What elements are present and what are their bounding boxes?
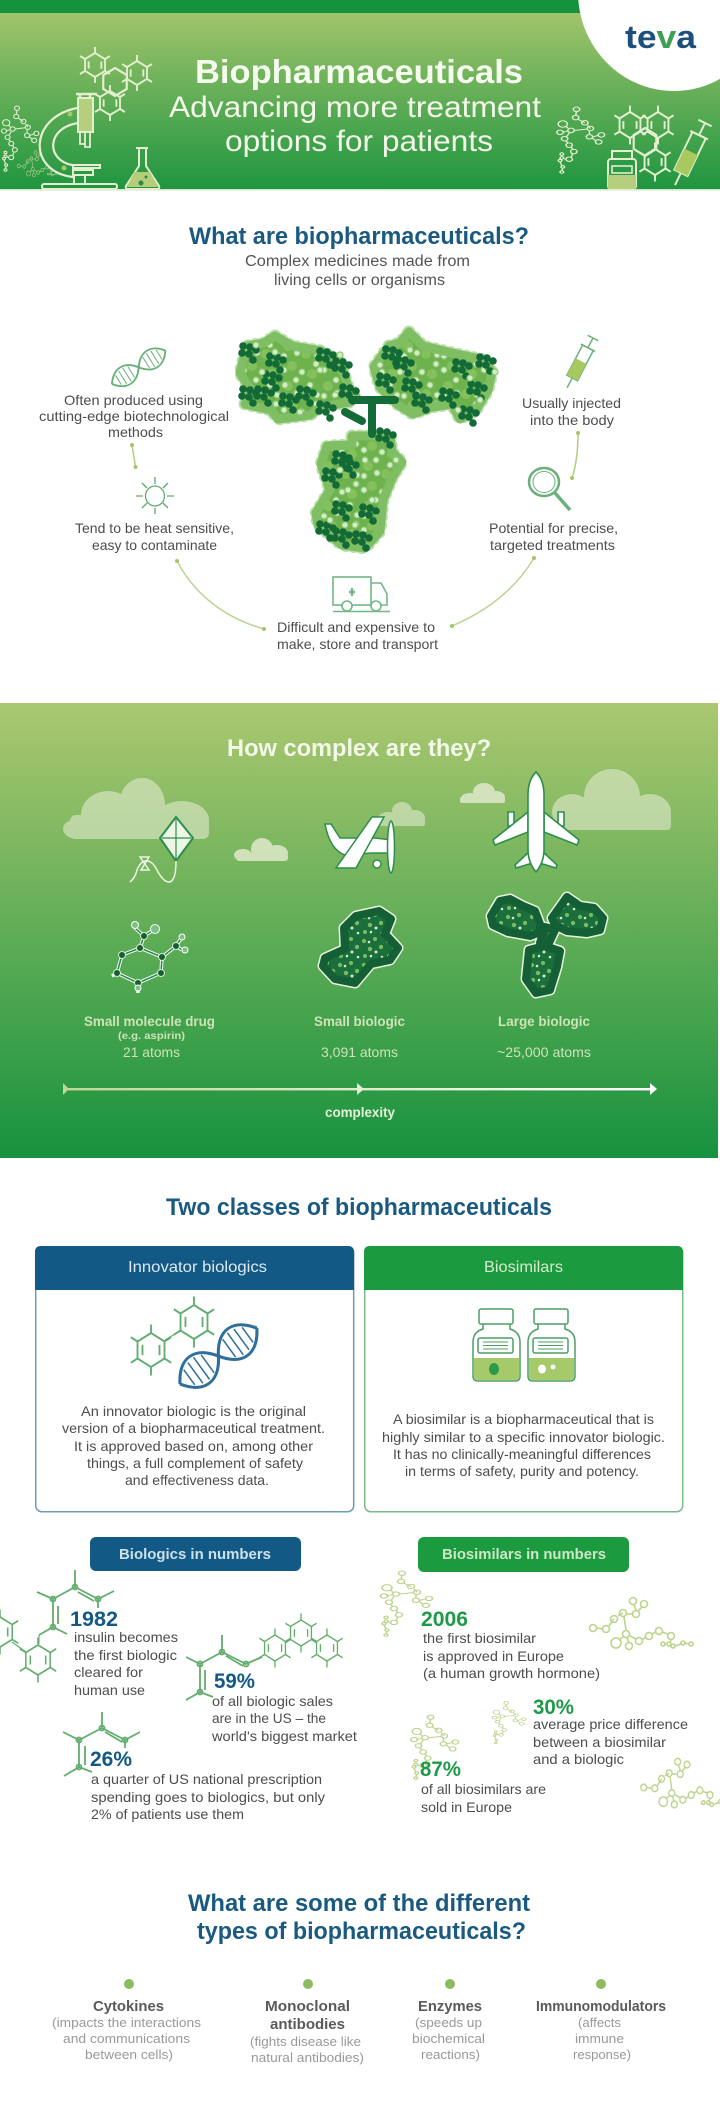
stat: 1982: the first biologic [74,1647,177,1663]
labels: large biologic [497,1014,591,1060]
body text [382,1411,665,1479]
stat: 87%: of all biosimilars are [421,1781,546,1797]
text: difficult [277,619,438,652]
type: enzymes: biochemical [412,2031,485,2046]
section: biosimilars in numbers [380,1537,720,1815]
type: enzymes: (speeds up [415,2015,482,2030]
text: injected: into the body [530,412,614,428]
stat: 2006: 2006 [421,1608,468,1631]
labels: small molecule: (e.g. aspirin) [118,1030,185,1042]
logo badge [578,0,720,91]
stat: 26%: 26% [90,1748,132,1771]
type: cytokines: Cytokines [93,1998,164,2015]
icon: molecule and dna [131,1296,267,1397]
panel: how complex [0,703,718,1158]
kite [130,817,193,882]
arrow: left arc [175,559,266,631]
icon: truck [333,577,390,612]
panel: innovator biologics [35,1246,354,1512]
molecule decorations [380,1571,720,1808]
labels: large biologic: ~25,000 atoms [497,1044,591,1060]
arrow: complexity [63,1083,657,1095]
stat: 1982: insulin becomes [74,1629,178,1645]
text: heat: Tend to be heat sensitive, [75,520,234,536]
molecule: aspirin [112,922,188,993]
stat: 30%: between a biosimilar [533,1734,666,1750]
subheading: Complex medicines made from [245,253,470,270]
body text: It is approved based on, among other [74,1438,313,1454]
section: types [52,1890,666,2065]
type: cytokines: (impacts the interactions [52,2015,202,2030]
icon: sun [136,477,174,514]
stat: 1982: cleared for [74,1664,143,1680]
body text: version of a biopharmaceutical treatment. [62,1420,325,1436]
pill heading [418,1537,629,1572]
labels: small molecule: 21 atoms [123,1044,180,1060]
heading: two classes: Two classes of biopharmaceuticals [166,1194,552,1221]
biplane [325,817,394,873]
body text: things, a full complement of safety [87,1455,303,1471]
stat: 87%: 87% [420,1758,461,1781]
stat: 30% [533,1696,688,1767]
connector [130,443,138,469]
antibody molecule [238,332,498,552]
stat: 2006: the first biosimilar [423,1630,536,1646]
header banner [0,0,720,190]
icon: dna [107,342,171,392]
body text: highly similar to a specific innovator biologic. [382,1429,665,1445]
icon: bottles [473,1309,575,1381]
text: injected [522,395,621,428]
text: produced [39,392,229,440]
stat: 26%: 2% of patients use them [91,1806,244,1822]
heading: What are some of the different [188,1890,530,1917]
heading: How complex are they? [227,735,491,762]
title: options for patients [225,125,493,158]
large biologic [491,897,603,993]
stat: 1982: 1982 [70,1608,118,1631]
text: precise: targeted treatments [490,537,615,553]
text: produced: cutting-edge biotechnological [39,408,229,424]
icon: header left decorations [1,47,159,189]
type: cytokines: and communications [63,2031,191,2046]
body text: An innovator biologic is the original [81,1403,306,1419]
labels: small biologic: Small biologic [314,1014,405,1029]
type: enzymes: reactions) [421,2047,480,2062]
type: cytokines [52,1979,202,2062]
title: Biopharmaceuticals [195,53,523,90]
stat: 1982: human use [74,1682,145,1698]
title [169,53,542,158]
stat: 1982 [70,1608,178,1698]
text: difficult: Difficult and expensive to [277,619,435,635]
stat: 87% [420,1758,546,1815]
stat: 59%: 59% [214,1670,255,1693]
arrow: right arc [450,556,536,628]
text: precise: Potential for precise, [489,520,618,536]
icon: syringe [560,334,600,391]
heading: What are biopharmaceuticals? [189,223,529,250]
small biologic [323,911,398,983]
stat: 2006 [421,1608,600,1681]
body text [62,1403,325,1488]
type: enzymes: Enzymes [418,1998,482,2015]
body text: A biosimilar is a biopharmaceutical that is [393,1411,654,1427]
icon: header right decorations [557,106,714,189]
stat: 2006: is approved in Europe [423,1648,564,1664]
text: difficult: make, store and transport [277,636,438,652]
connector [570,431,580,480]
stat: 26%: spending goes to biologics, but only [91,1789,325,1805]
subheading: living cells or organisms [274,272,445,289]
body text: It has no clinically-meaningful differences [393,1446,651,1462]
header text: Biosimilars [484,1259,563,1276]
heading [188,1890,530,1945]
stat: 59%: of all biologic sales [212,1693,333,1709]
stat: 2006: (a human growth hormone) [423,1665,600,1681]
label: complexity: complexity [325,1105,395,1120]
labels: small molecule [84,1014,215,1060]
header text: Innovator biologics [128,1259,267,1276]
stat: 30%: 30% [533,1696,574,1719]
type: monoclonal antibodies: (fights disease like [250,2034,361,2049]
text: heat: easy to contaminate [92,537,217,553]
body text: in terms of safety, purity and potency. [405,1463,639,1479]
type: monoclonal antibodies: antibodies [270,2016,345,2033]
text: precise [489,520,618,553]
stat: 59% [211,1670,357,1744]
pill heading: Biologics in numbers [119,1546,271,1563]
molecule decorations [0,1570,343,1776]
type: cytokines: between cells) [85,2047,173,2062]
section: what are biopharmaceuticals [39,223,621,652]
stat: 30%: and a biologic [533,1751,624,1767]
stat: 59%: world's biggest market [211,1728,357,1744]
type: immunomodulators: Immunomodulators [536,1998,666,2015]
text: heat [75,520,234,553]
panel: biosimilars [364,1246,683,1512]
type: monoclonal antibodies: natural antibodies) [251,2050,364,2065]
clouds [63,769,671,861]
text: injected: Usually injected [522,395,621,411]
section: biologics in numbers [0,1537,357,1822]
airplane [493,772,579,872]
type: enzymes [412,1979,485,2062]
type: immunomodulators [536,1979,666,2062]
subheading [245,253,470,289]
stat: 26% [90,1748,325,1822]
type: monoclonal antibodies: Monoclonal [265,1998,350,2015]
labels: small molecule: Small molecule drug [84,1014,215,1029]
type: immunomodulators: immune [575,2031,624,2046]
pill heading: Biosimilars in numbers [442,1546,606,1563]
body text: and effectiveness data. [125,1472,269,1488]
stat: 87%: sold in Europe [421,1799,512,1815]
stat: 59%: are in the US – the [212,1710,326,1726]
labels: small biologic [314,1014,405,1060]
icon: magnifier [529,468,570,510]
labels: large biologic: Large biologic [498,1014,590,1029]
type: immunomodulators: response) [573,2047,631,2062]
stat: 30%: average price difference [533,1716,688,1732]
text: produced: methods [108,424,163,440]
stat: 26%: a quarter of US national prescription [91,1771,322,1787]
type: immunomodulators: (affects [578,2015,622,2030]
type: monoclonal antibodies [250,1979,364,2065]
text: produced: Often produced using [64,392,203,408]
labels: small biologic: 3,091 atoms [321,1044,398,1060]
title: Advancing more treatment [169,91,542,124]
logo: teva: teva [625,19,696,55]
heading: types of biopharmaceuticals? [197,1918,526,1945]
pill heading [90,1537,301,1571]
